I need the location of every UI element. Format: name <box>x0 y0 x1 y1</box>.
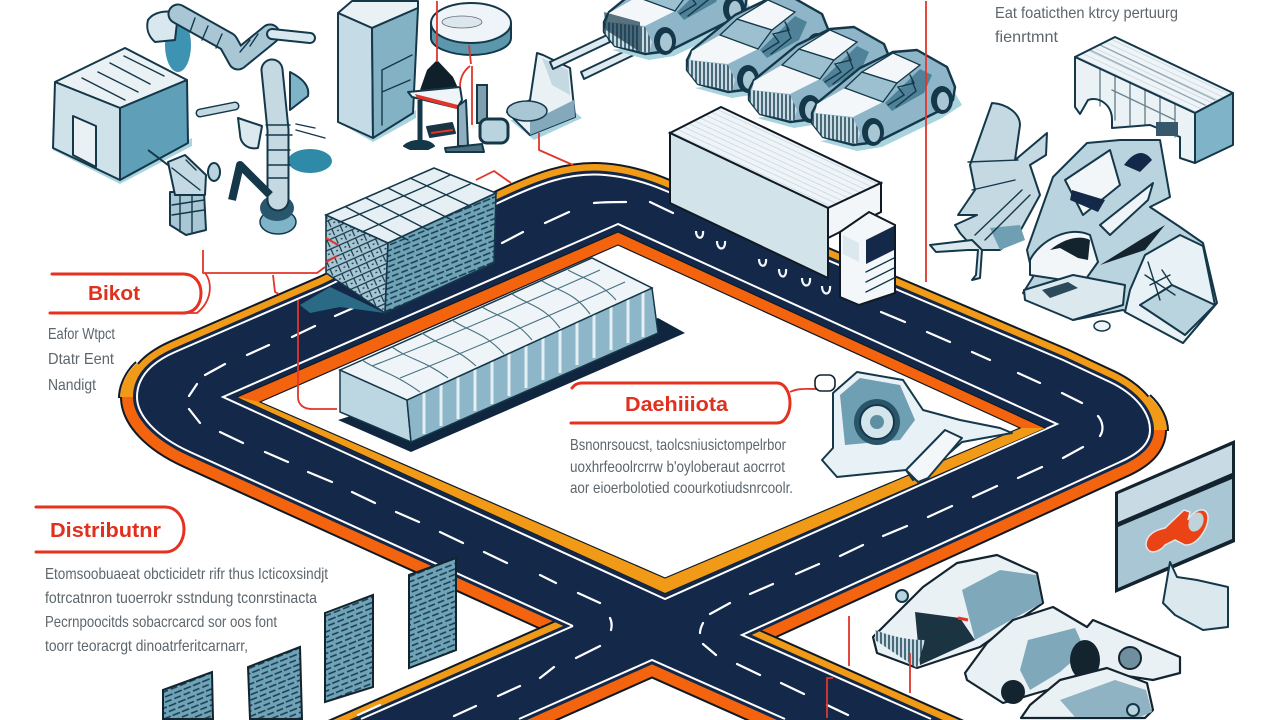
text block: lower left: Etomsoobuaeat obcticidetr rifr thus Icticoxsindjt <box>45 566 328 583</box>
text block: lower left: toorr teoracrgt dinoatrferitcarnarr, <box>45 638 248 655</box>
text block: centre: Bsnonrsoucst, taolcsniusictompelrbor <box>570 437 787 454</box>
car 3 <box>812 50 962 151</box>
block side with stripes <box>407 288 658 442</box>
warehouse top right <box>1075 37 1233 163</box>
right column <box>477 85 487 123</box>
black bag <box>420 60 458 90</box>
road edge: amber and orange borders <box>119 175 1168 720</box>
warehouse roof <box>1075 37 1233 113</box>
table top <box>408 87 462 108</box>
text block: lower left: fotrcatnron tuoerrokr sstndung tconrstinacta <box>45 590 317 607</box>
truck trailer side <box>670 133 828 278</box>
text block: left upper: Eafor Wtpct <box>48 326 115 343</box>
forklift car <box>604 0 754 60</box>
floor part <box>427 123 455 137</box>
lower car A <box>873 555 1043 668</box>
label: Distributor <box>36 507 184 552</box>
truck trailer front <box>828 183 881 238</box>
robot arm centre <box>200 70 332 234</box>
central island <box>223 224 1057 599</box>
rotary table disc <box>431 3 511 55</box>
turbine machine <box>822 372 1012 482</box>
rack 2 <box>248 647 302 719</box>
factory left wall <box>53 82 120 180</box>
text block: centre: uoxhrfeoolrcrrw b'oyloberaut aocrrot <box>570 459 785 476</box>
billboard red emblem <box>1146 510 1208 552</box>
factory right wall <box>120 80 188 180</box>
robot arm upper <box>147 12 310 72</box>
truck trailer top <box>670 107 881 208</box>
lower car B <box>965 607 1180 704</box>
road edge lines <box>137 175 1150 719</box>
label: Bikot <box>50 273 210 313</box>
road network <box>119 175 1168 720</box>
small box <box>480 119 508 143</box>
road surface <box>137 175 1150 720</box>
billboard <box>1115 440 1235 593</box>
warehouse side <box>1195 93 1233 163</box>
machine body centre <box>1023 140 1217 343</box>
car 1 <box>687 0 837 98</box>
factory shadow <box>53 138 192 184</box>
machine stand <box>404 60 508 152</box>
seat machine <box>507 53 582 140</box>
rack 3 <box>325 595 373 702</box>
car 2 <box>749 27 899 128</box>
stack top <box>326 168 496 243</box>
factory door <box>73 116 96 167</box>
pallet stack on road <box>300 168 496 313</box>
robot arm lower <box>168 155 220 235</box>
stack left face <box>326 215 388 313</box>
stack shadow <box>300 287 385 313</box>
machine base <box>1024 275 1125 320</box>
lane dashes <box>189 202 1102 716</box>
text block: lower left <box>45 566 328 655</box>
label: Dachiilota: Daehiiiota <box>625 394 729 416</box>
text block: centre <box>570 437 793 497</box>
label: Distributor: Distributnr <box>50 520 161 542</box>
factory building top left <box>53 48 192 184</box>
lower car C <box>1021 668 1153 718</box>
truck <box>670 107 895 305</box>
rack 4 <box>409 558 456 668</box>
table legs <box>418 100 422 142</box>
document racks <box>163 558 456 719</box>
block top <box>340 258 652 400</box>
tall cabinet <box>338 1 418 142</box>
rack 1 <box>163 672 213 719</box>
crate under billboard <box>1163 562 1228 630</box>
stack right face <box>385 193 496 313</box>
forklift cab <box>1125 235 1215 343</box>
text block: top right <box>995 5 1178 46</box>
text block: lower left: Pecrnpoocitds sobacrcarcd sor oos font <box>45 614 277 631</box>
row of parked cars <box>687 0 962 151</box>
robot body left <box>955 103 1047 250</box>
warehouse front <box>1075 57 1195 163</box>
long cargo block in central island <box>338 258 685 452</box>
text block: left upper: Dtatr Eent <box>48 351 115 368</box>
text block: top right: Eat foaticthen ktrcy pertuurg <box>995 5 1178 22</box>
block end face <box>340 370 411 442</box>
truck wheels <box>696 231 830 294</box>
road shoulder <box>137 175 1150 720</box>
label: Dachiilota <box>571 383 790 423</box>
machine cluster right <box>930 103 1217 343</box>
label: Bikot: Bikot <box>88 283 140 305</box>
text block: left upper <box>48 326 115 394</box>
red connector lines <box>203 1 926 718</box>
forklift tines <box>550 35 640 79</box>
lower right cars <box>873 555 1180 718</box>
text block: top right: fienrtmnt <box>995 29 1059 46</box>
factory roof <box>55 48 187 108</box>
text block: centre: aor eioerbolotied coourkotiudsnrcoolr. <box>570 480 793 497</box>
text block: left upper: Nandigt <box>48 377 96 394</box>
block shadow <box>338 318 685 452</box>
truck cab <box>840 212 895 305</box>
